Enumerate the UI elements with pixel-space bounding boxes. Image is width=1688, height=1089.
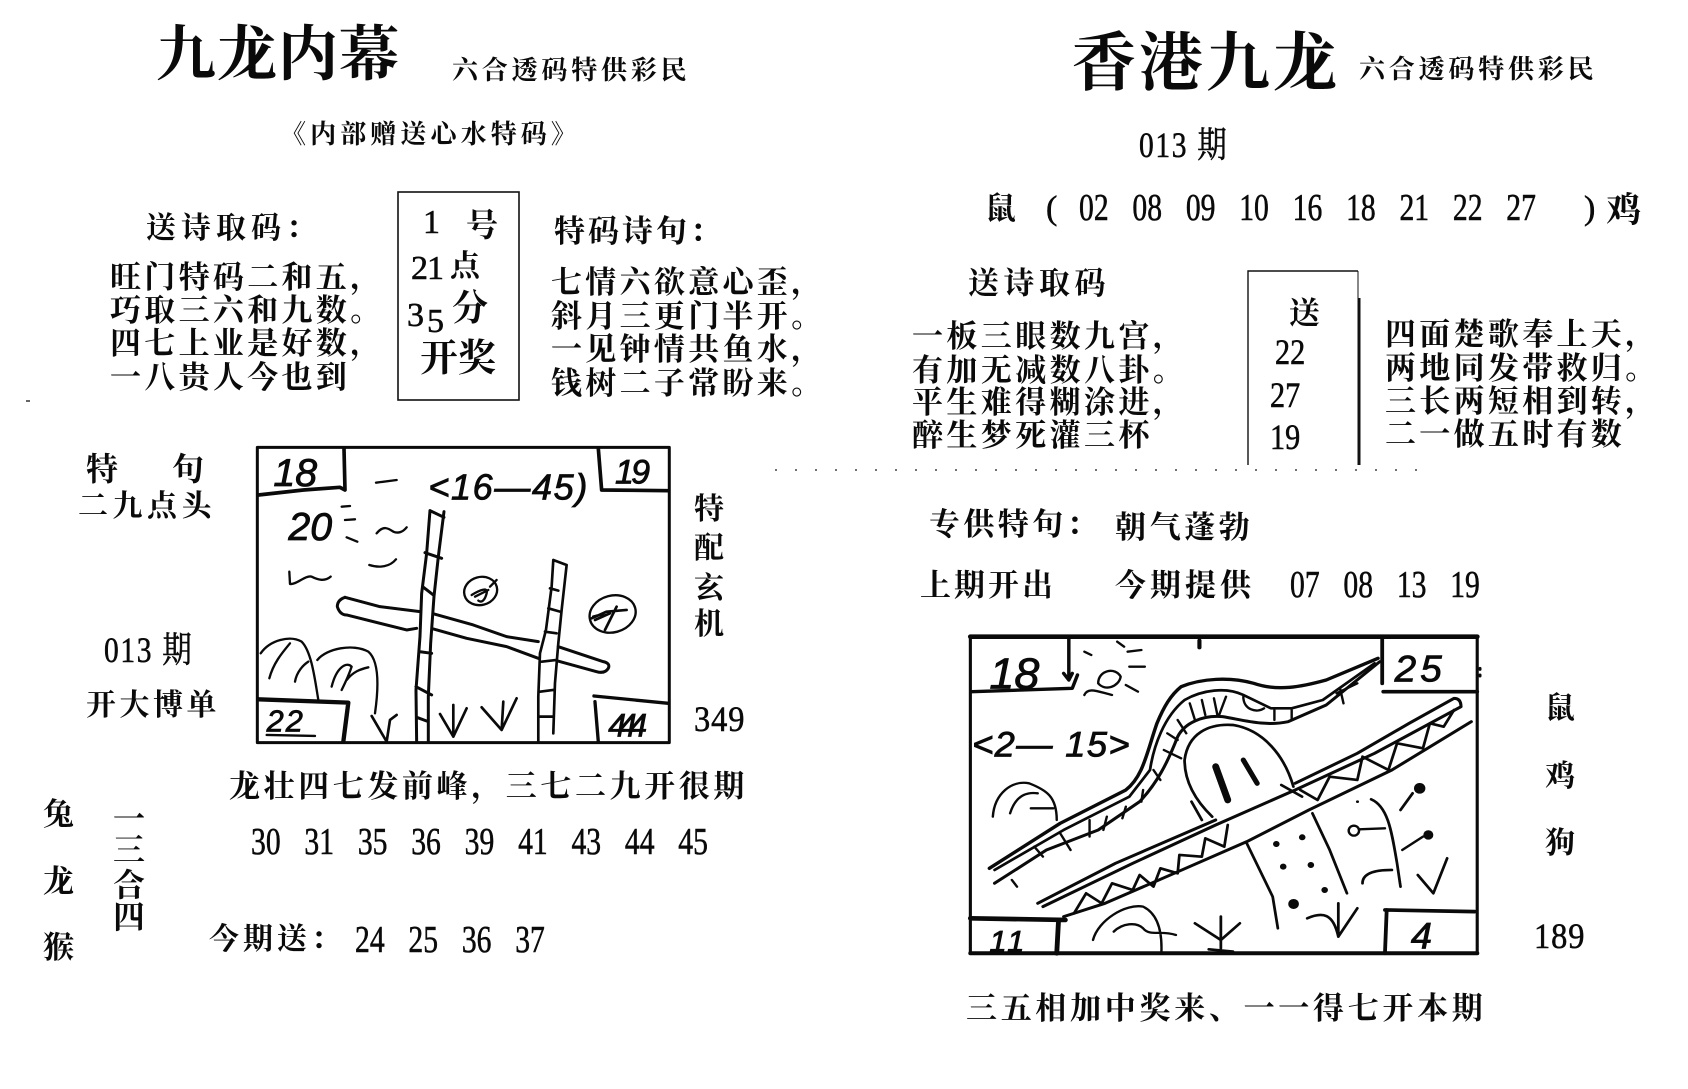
draw time box: 开奖: [420, 338, 496, 380]
title: 香港九龙: 香港九龙: [1072, 28, 1340, 99]
sketch: dragon picture: <2— 15>: [972, 725, 1131, 765]
this issue gift: 今期送：: [209, 923, 345, 956]
zodiac number row: 鸡: [1606, 191, 1641, 230]
zodiac column: 龙: [43, 864, 74, 899]
gift number box: 送: [1289, 296, 1321, 331]
number: 349: 349: [694, 699, 745, 739]
text block: left poem: [110, 260, 384, 395]
text block: left poem: 有加无减数八卦。: [912, 353, 1187, 388]
text block: left poem: 醉生梦死灌三杯: [912, 418, 1153, 453]
sketch: bamboo picture: <16—45): [428, 466, 589, 507]
text block: right poem: [551, 265, 825, 401]
sketch: dragon picture: 25: [1394, 649, 1446, 690]
text block: left poem: 巧取三六和九数。: [110, 293, 384, 328]
text block: left poem: [912, 319, 1187, 453]
vertical label: special mystery: 机: [694, 608, 724, 641]
sketch: bamboo picture: 19: [615, 453, 650, 491]
sketch: bamboo picture: 444: [608, 708, 646, 744]
text block: left poem: 一八贵人今也到: [110, 360, 350, 395]
text block: right poem: 七情六欲意心歪，: [551, 265, 825, 301]
zodiac column: 猴: [43, 930, 74, 965]
three-in-four column: 一: [113, 801, 145, 837]
draw time box: 分: [452, 288, 488, 328]
heading: poem for code: 送诗取码：: [146, 212, 321, 245]
zodiac number row: [985, 188, 1641, 230]
sketch: bamboo picture: 22: [266, 705, 305, 739]
issue number: 013 期: [104, 631, 193, 671]
gift number box: 19: [1270, 418, 1300, 458]
number: 189: 189: [1534, 916, 1585, 956]
heading: special code poem: 特码诗句：: [554, 214, 724, 249]
text block: right poem: 斜月三更门半开。: [551, 299, 825, 334]
zodiac column: [43, 797, 74, 965]
special phrase: 句: [172, 451, 204, 487]
sketch: bamboo picture: 20: [287, 505, 332, 549]
vertical label: special mystery: 特: [694, 493, 724, 526]
issue number: 013 期: [1139, 126, 1228, 166]
vertical label: special mystery: 玄: [694, 572, 726, 605]
special phrase: [78, 451, 216, 523]
heading: poem for code: 送诗取码: [968, 266, 1110, 301]
subtitle: 六合透码特供彩民: [1359, 55, 1597, 84]
draw time box: 1: [423, 204, 440, 241]
text block: right poem: 二一做五时有数: [1385, 417, 1625, 452]
sketch: bamboo picture: [257, 447, 669, 744]
draw time box: 号: [466, 207, 498, 243]
text block: left poem: 旺门特码二和五，: [110, 260, 384, 296]
zodiac number row: (: [1046, 190, 1057, 227]
last issue label: 上期开出: [920, 568, 1056, 603]
special phrase: 二九点头: [78, 490, 216, 523]
special phrase: 特: [86, 451, 118, 487]
vertical zodiac labels: 鼠: [1545, 692, 1575, 725]
gift number box: 22: [1275, 333, 1305, 373]
gift numbers: 24 25 36 37: [355, 920, 545, 961]
subtitle: 六合透码特供彩民: [452, 56, 690, 85]
draw time box: 点: [450, 250, 482, 283]
verse line: 龙壮四七发前峰，三七二九开很期: [229, 769, 748, 805]
sketch: dragon picture: [970, 637, 1480, 959]
text block: right poem: 一见钟情共鱼水，: [551, 332, 825, 368]
zodiac number row: ): [1584, 190, 1595, 227]
title: 九龙内幕: 九龙内幕: [156, 22, 400, 88]
panel: left sheet 九龙内幕: [43, 22, 825, 965]
text block: left poem: 平生难得糊涂进，: [912, 385, 1187, 421]
vertical zodiac labels: 鸡: [1545, 760, 1575, 793]
three-in-four column: 四: [113, 899, 145, 935]
text block: right poem: 四面楚歌奉上天，: [1385, 317, 1659, 353]
bottom verse: 三五相加中奖来、一一得七开本期: [966, 991, 1486, 1026]
draw time box: 21: [411, 250, 443, 287]
sketch: bamboo picture: 18: [273, 451, 317, 495]
phrase value: 朝气蓬勃: [1115, 510, 1253, 545]
text block: right poem: 两地同发带救归。: [1385, 351, 1659, 386]
text block: left poem: 一板三眼数九宫，: [912, 319, 1187, 355]
three-in-four column: 合: [113, 867, 145, 903]
this issue numbers: 07 08 13 19: [1290, 565, 1480, 606]
gift number box: 27: [1270, 376, 1300, 416]
three-in-four column: [113, 801, 145, 935]
draw time box: 35: [407, 297, 444, 340]
vertical zodiac labels: 狗: [1545, 827, 1575, 860]
draw time box: [398, 192, 519, 400]
sketch: dragon picture: 18: [989, 650, 1040, 698]
sketch: dragon picture: 11: [989, 925, 1027, 959]
zodiac column: 兔: [43, 797, 74, 832]
vertical zodiac labels: [1545, 692, 1575, 860]
vertical label: special mystery: 配: [694, 532, 724, 565]
text block: right poem: 三长两短相到转，: [1385, 384, 1659, 420]
this issue label: 今期提供: [1115, 568, 1255, 603]
text block: right poem: [1385, 317, 1659, 452]
sub-heading: 《内部赠送心水特码》: [280, 120, 581, 149]
zodiac number row: 02 08 09 10 16 18 21 22 27: [1079, 188, 1536, 229]
sketch: dragon picture: 4: [1411, 915, 1432, 956]
three-in-four column: 三: [113, 832, 145, 868]
panel: right sheet 香港九龙: [912, 28, 1659, 1026]
text block: left poem: 四七上业是好数，: [110, 326, 384, 362]
special phrase: 专供特句：: [929, 507, 1101, 542]
text block: right poem: 钱树二子常盼来。: [551, 366, 825, 401]
vertical label: special mystery: [694, 493, 726, 641]
text: big win: 开大博单: [86, 689, 220, 722]
gift number box: [1248, 271, 1359, 465]
zodiac number row: 鼠: [985, 191, 1016, 226]
numbers row: 30 31 35 36 39 41 43 44 45: [251, 822, 708, 863]
